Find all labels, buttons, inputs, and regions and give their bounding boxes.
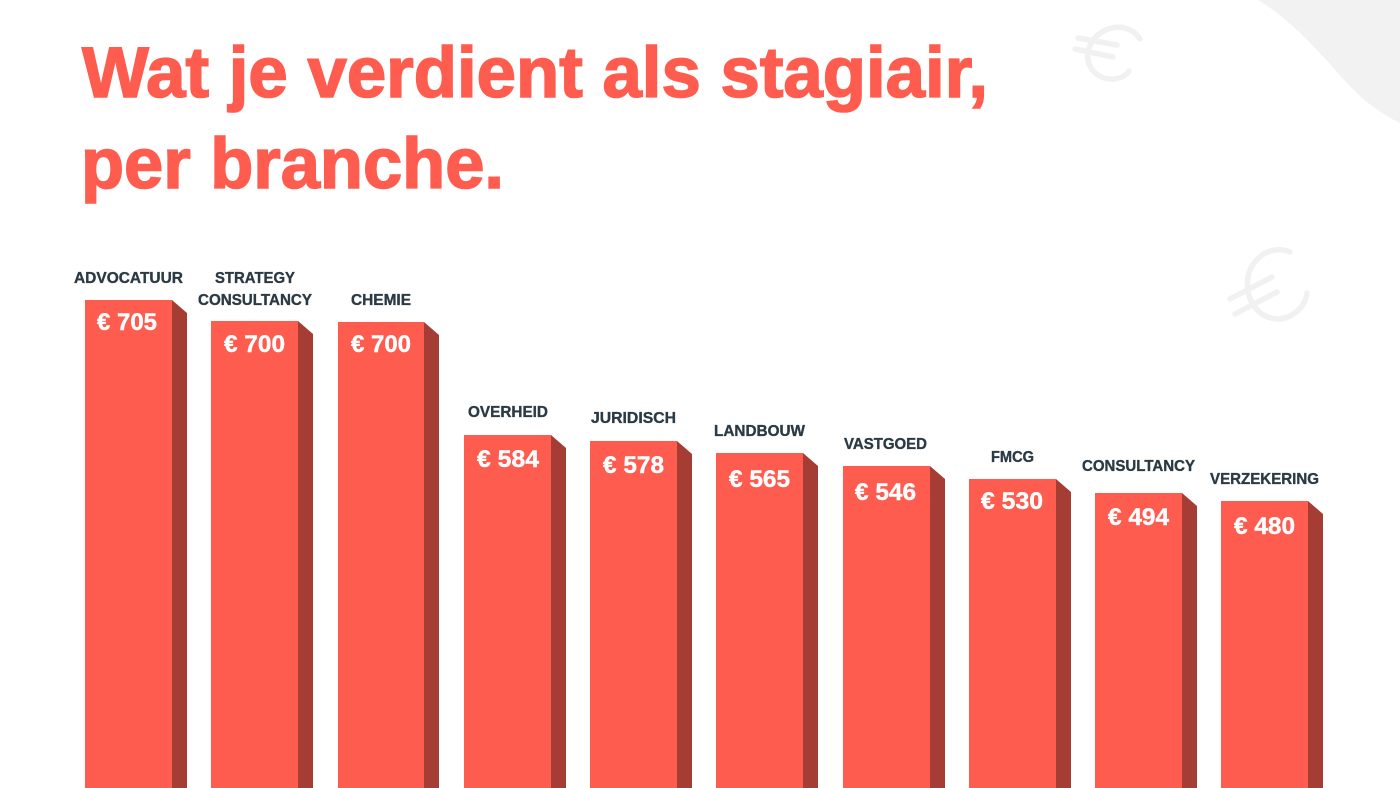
bar: Landbouw: LANDBOUW: [714, 423, 805, 440]
bar: Chemie: [338, 292, 439, 788]
title: Wat je verdient als stagiair,: [82, 34, 988, 113]
bar: Vastgoed: [843, 436, 945, 788]
bar: Advocatuur: € 705: [97, 309, 157, 336]
decorative corner shape: [1258, 0, 1400, 123]
bar: Landbouw: € 565: [729, 466, 790, 493]
bar: Landbouw: [714, 423, 818, 788]
bar: Vastgoed: VASTGOED: [844, 436, 927, 453]
bar: Strategy Consultancy: € 700: [224, 331, 285, 358]
bar: FMCG: [969, 449, 1071, 788]
icon: euro sign right: [1230, 250, 1307, 319]
bar: Advocatuur: [74, 270, 187, 788]
bar: Verzekering: € 480: [1234, 513, 1295, 540]
title: per branche.: [81, 125, 504, 204]
bar: Overheid: [464, 404, 566, 788]
bar: Overheid: € 584: [477, 446, 540, 473]
bar: Verzekering: VERZEKERING: [1210, 471, 1319, 488]
bar: Verzekering: [1210, 471, 1323, 788]
title: [81, 34, 988, 204]
bar: FMCG: € 530: [981, 488, 1043, 515]
bar: Juridisch: [590, 410, 692, 788]
bar: Chemie: € 700: [351, 331, 411, 358]
bar: Advocatuur: ADVOCATUUR: [74, 270, 183, 287]
bar: Strategy Consultancy: [198, 270, 313, 788]
bar: Consultancy: € 494: [1108, 504, 1170, 531]
bar: Strategy Consultancy: STRATEGY: [215, 270, 296, 287]
bar: FMCG: FMCG: [991, 449, 1034, 466]
bar: Consultancy: [1082, 458, 1197, 788]
bar: Juridisch: JURIDISCH: [591, 410, 676, 427]
bar: Consultancy: CONSULTANCY: [1082, 458, 1196, 475]
icon: euro sign top: [1075, 27, 1140, 79]
bar: Strategy Consultancy: CONSULTANCY: [198, 292, 313, 309]
bar: Juridisch: € 578: [603, 452, 664, 479]
bar: Overheid: OVERHEID: [468, 404, 548, 421]
bar chart: [74, 270, 1323, 788]
bar: Vastgoed: € 546: [855, 479, 916, 506]
bar: Chemie: CHEMIE: [351, 292, 411, 309]
